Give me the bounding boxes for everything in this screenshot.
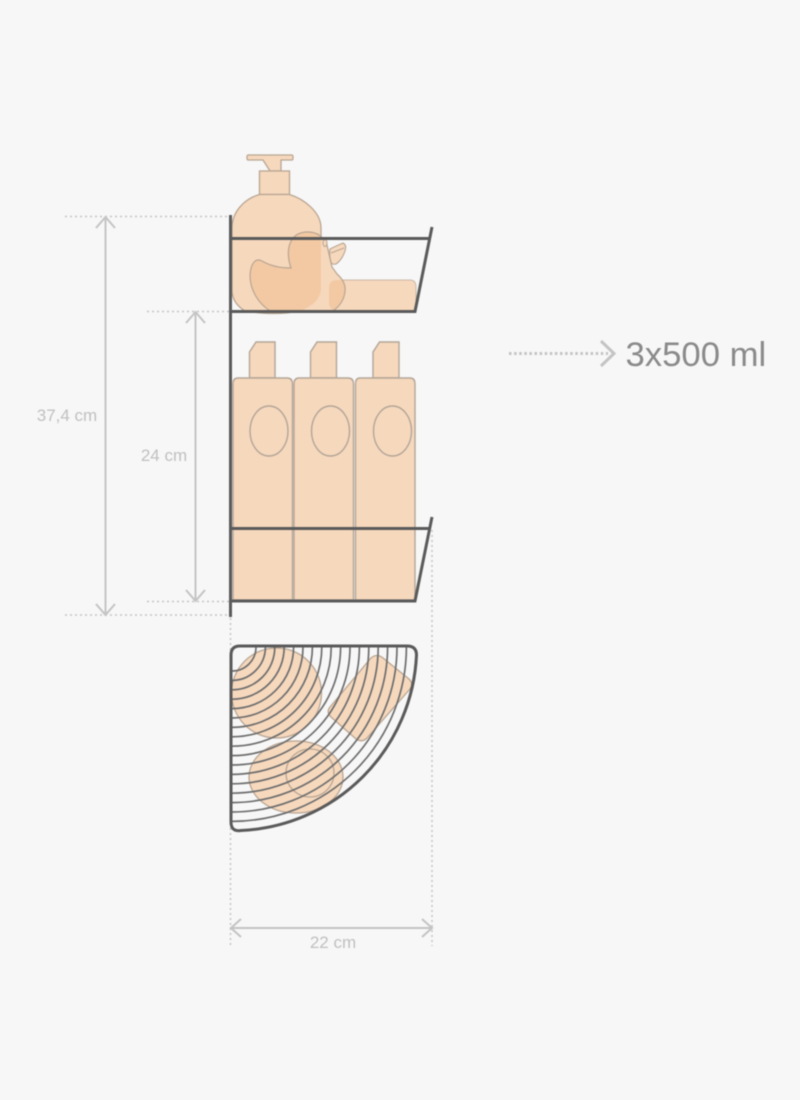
dimension: shelf spacing 24 cm — [141, 312, 205, 601]
bottle 2 — [294, 342, 354, 600]
icon: round sponge — [232, 648, 322, 738]
icon: three 500 ml bottles — [233, 342, 415, 600]
dimension: width 22 cm — [231, 919, 432, 952]
callout: bottle capacity 3x500 ml: 3x500 ml — [626, 336, 766, 374]
bottle 1 — [233, 342, 292, 600]
icon: rubber duck — [250, 232, 346, 311]
icon: bar of soap — [328, 656, 412, 741]
basket wire arcs — [232, 647, 406, 821]
callout: bottle capacity 3x500 ml — [509, 336, 766, 374]
infographic: corner shower shelf dimensions — [37, 154, 764, 948]
shelf side view frame — [230, 215, 432, 617]
icon: bar of soap in upper shelf — [329, 280, 416, 311]
dimension: width 22 cm: 22 cm — [310, 933, 356, 952]
basket outer frame — [231, 646, 416, 831]
top view: basket with soaps — [231, 646, 416, 831]
icon: pump soap bottle — [232, 155, 321, 314]
dimension: total height 37,4 cm — [37, 217, 115, 615]
icon: oval soap — [249, 741, 343, 813]
dimension: total height 37,4 cm: 37,4 cm — [37, 406, 97, 425]
bottle 3 — [356, 342, 415, 600]
dimension: shelf spacing 24 cm: 24 cm — [141, 446, 187, 465]
